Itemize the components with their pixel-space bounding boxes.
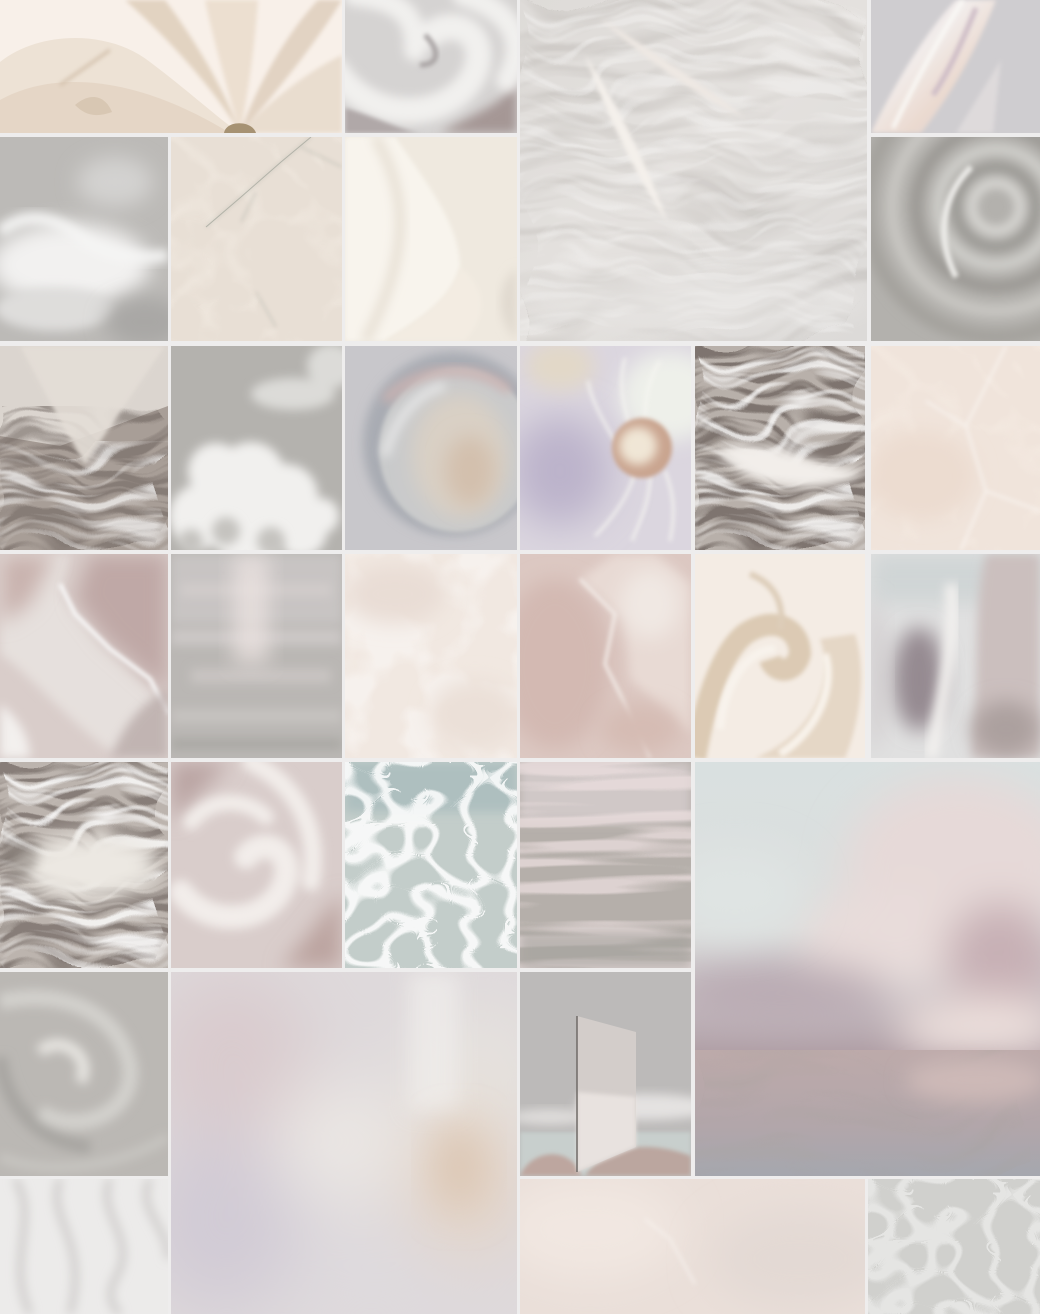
tile: dark ripple <box>695 346 865 550</box>
tile: soft blurred reflection <box>171 554 342 758</box>
tile: blush onyx <box>871 346 1040 550</box>
tile: large rippled water with feathers <box>520 0 867 341</box>
tile: rose swirl <box>171 762 342 968</box>
tile: translucent flower <box>0 0 342 133</box>
tile: pale onyx <box>345 554 517 758</box>
tile: grey cloud swirl <box>0 137 168 341</box>
tile: silver whirl <box>0 972 168 1176</box>
tile: cream marble <box>171 137 342 341</box>
tile: rose agate <box>520 554 691 758</box>
tile: silver vortex <box>871 137 1040 341</box>
tile: pink clouds over sea <box>695 762 1040 1176</box>
tile: pale caustic water <box>868 1179 1040 1314</box>
tile: nacre shell <box>345 346 517 550</box>
tile: ivory petal <box>345 137 517 341</box>
tile: streaked water <box>520 762 691 968</box>
tile: nude form <box>871 554 1040 758</box>
tile: cumulus clouds <box>171 346 342 550</box>
tile: wide blush onyx <box>520 1179 865 1314</box>
tile: mauve agate <box>0 554 168 758</box>
tile: white flowing lines <box>10 1179 168 1314</box>
tile: sunlit pool <box>345 762 517 968</box>
tile: feathered ripple <box>0 762 168 968</box>
tile: mirror monolith <box>520 972 691 1176</box>
tile: folded ripple v <box>0 346 168 550</box>
tile: cream sculpted swirl <box>695 554 865 758</box>
tile: pearl in shell <box>520 346 691 550</box>
tile: pearl swirl <box>345 0 517 133</box>
tile: iridescent blade <box>871 0 1040 133</box>
tile: iridescent haze <box>171 972 517 1314</box>
